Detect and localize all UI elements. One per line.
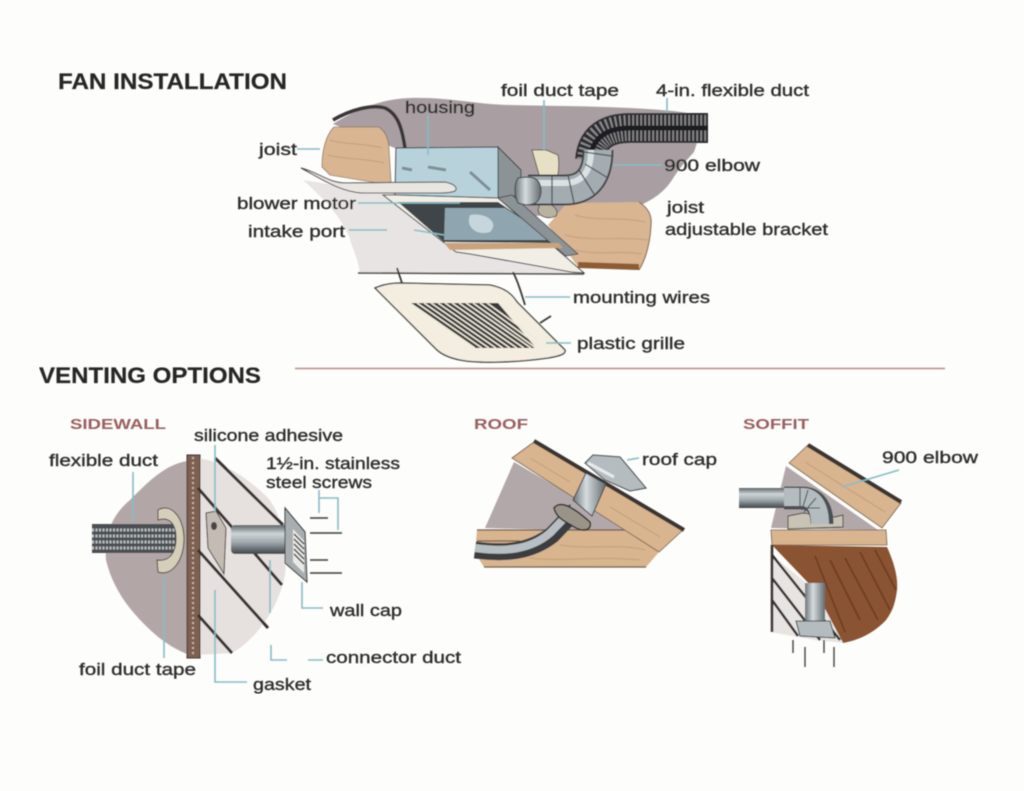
label: screws: 1½-in. stainless	[266, 454, 400, 473]
label: joist right: joist	[666, 198, 704, 217]
left joist	[322, 127, 391, 183]
soffit vent cap	[796, 621, 835, 638]
label: 900 elbow: 900 elbow	[882, 448, 979, 467]
illustration: soffit vent	[739, 445, 901, 667]
elbow	[784, 488, 822, 524]
siding lines	[198, 458, 283, 653]
label: 900 elbow: 900 elbow	[664, 156, 761, 175]
label: plastic grille: plastic grille	[577, 334, 685, 353]
attic background	[485, 462, 635, 532]
soffit wood panel	[772, 545, 897, 643]
leader lines: sidewall	[133, 445, 338, 682]
wall cap	[285, 508, 307, 582]
adjustable bracket frame	[383, 195, 584, 273]
label: silicone adhesive: silicone adhesive	[194, 426, 343, 445]
foil duct tape	[532, 150, 559, 218]
labels: sidewall	[49, 426, 461, 694]
screws	[310, 518, 342, 573]
mounting wires	[397, 268, 551, 323]
labels: sidewall: steel screws	[266, 473, 372, 492]
illustration: roof vent	[475, 441, 684, 567]
vertical pipe	[805, 583, 825, 621]
power cable	[301, 168, 456, 193]
horizontal duct	[739, 488, 785, 508]
vertical pipe	[573, 473, 606, 516]
ceiling	[303, 180, 584, 275]
foil duct tape ring	[157, 508, 184, 573]
label: gasket: gasket	[253, 675, 311, 694]
label: intake port: intake port	[248, 222, 345, 241]
heading: roof: ROOF	[474, 416, 528, 433]
roof cap	[585, 455, 646, 491]
screws	[793, 640, 834, 667]
label: housing: housing	[405, 98, 475, 117]
label: joist: joist	[258, 140, 297, 159]
title: fan installation: FAN INSTALLATION	[58, 69, 287, 94]
gasket	[206, 511, 226, 574]
illustration: fan installation	[301, 98, 708, 362]
flexible duct	[590, 128, 708, 160]
right joist	[548, 202, 651, 270]
cable to housing	[333, 107, 405, 148]
siding	[770, 545, 843, 643]
connector duct	[231, 525, 287, 554]
attic background	[771, 466, 878, 530]
roof rafter	[512, 441, 684, 552]
duct pipe	[475, 508, 576, 552]
label: 4-in. flexible duct: 4-in. flexible duct	[656, 81, 809, 100]
label: adjustable bracket: adjustable bracket	[665, 220, 828, 239]
heading: sidewall: SIDEWALL	[70, 416, 166, 433]
top plate	[771, 530, 887, 545]
illustration: sidewall vent	[92, 455, 342, 658]
housing box	[395, 147, 521, 198]
interior background	[106, 461, 190, 655]
wall section	[187, 455, 200, 658]
siding background	[198, 458, 286, 655]
leader line: roof cap	[627, 458, 639, 460]
roof rafter	[789, 445, 901, 528]
label: flexible duct: flexible duct	[49, 451, 158, 470]
flange	[788, 513, 843, 529]
heading: soffit: SOFFIT	[743, 416, 809, 433]
title: venting options: VENTING OPTIONS	[39, 363, 261, 388]
plastic grille	[375, 283, 565, 362]
foil tape ring	[554, 504, 590, 530]
label: foil duct tape: foil duct tape	[79, 660, 196, 679]
labels: fan installation	[237, 81, 828, 353]
attic background	[333, 98, 705, 220]
ceiling joist	[475, 530, 659, 567]
label: wall cap: wall cap	[329, 601, 402, 620]
leader lines: fan installation	[297, 98, 667, 343]
label: roof cap: roof cap	[642, 450, 717, 469]
90 degree elbow	[515, 150, 612, 205]
label: blower motor: blower motor	[237, 194, 356, 213]
leader line: soffit elbow	[842, 470, 899, 487]
label: mounting wires: mounting wires	[573, 288, 710, 307]
flexible duct	[92, 524, 182, 553]
label: connector duct: connector duct	[326, 648, 461, 667]
label: foil duct tape: foil duct tape	[501, 81, 619, 100]
